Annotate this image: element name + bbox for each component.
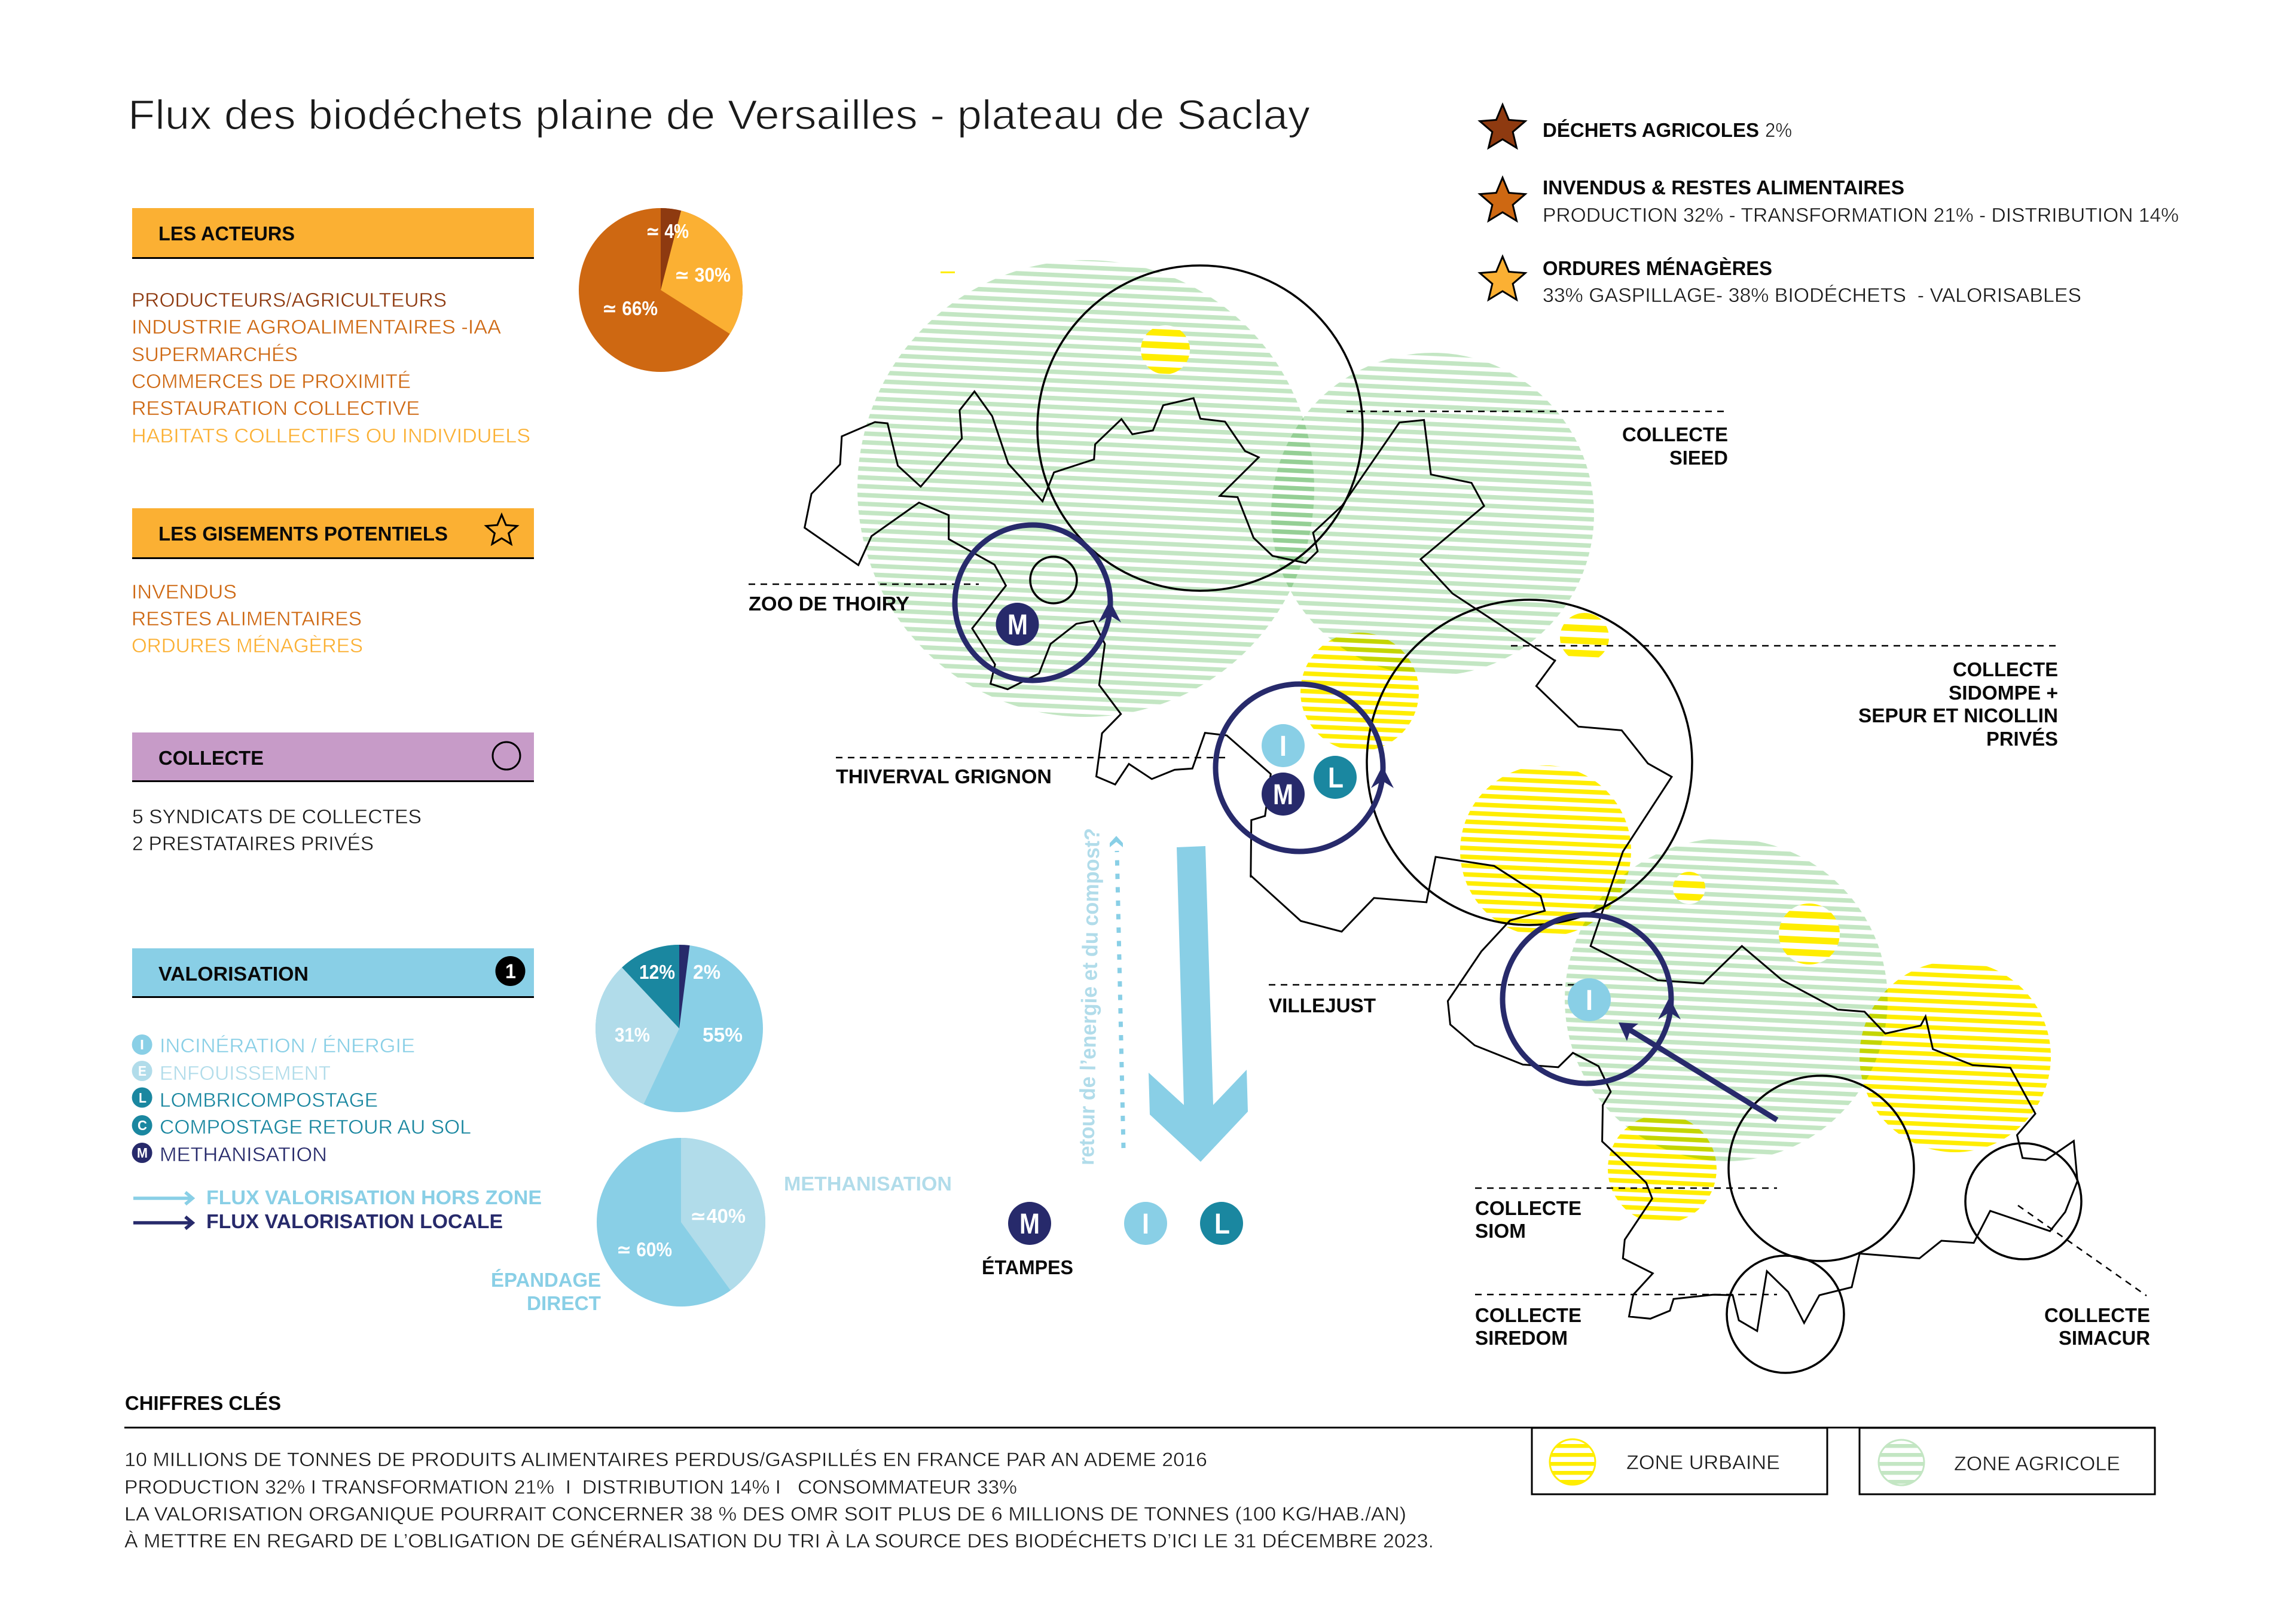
icon: star brown bbox=[1480, 105, 1525, 148]
legend: flux locale: FLUX VALORISATION LOCALE bbox=[206, 1210, 503, 1232]
pie chart: valorisation: 31% bbox=[615, 1024, 650, 1046]
site: zoo de thoiry bbox=[955, 525, 1121, 680]
legend: flux hors zone: FLUX VALORISATION HORS ZONE bbox=[206, 1186, 542, 1208]
text block: list of actors: SUPERMARCHÉS bbox=[132, 343, 298, 365]
legend: valorisation types: METHANISATION bbox=[160, 1143, 327, 1165]
badge: incineration etampes: I bbox=[1142, 1208, 1149, 1240]
label: collecte siom bbox=[1475, 1197, 1581, 1242]
heading: chiffres cles: CHIFFRES CLÉS bbox=[125, 1392, 281, 1414]
zones urbaines bbox=[941, 271, 2051, 1223]
text block: invendus: PRODUCTION 32% - TRANSFORMATION 21% - DISTRIBUTION 14% bbox=[1543, 204, 2179, 226]
panel: collecte bbox=[132, 732, 534, 854]
text block: invendus bbox=[1543, 176, 2179, 226]
zones agricoles bbox=[857, 260, 1888, 1161]
label: collecte siredom: SIREDOM bbox=[1475, 1327, 1568, 1349]
heading: les acteurs bbox=[132, 208, 534, 259]
site: villejust bbox=[1503, 915, 1681, 1083]
legend: valorisation types: LOMBRICOMPOSTAGE bbox=[160, 1089, 378, 1111]
pie chart: valorisation bbox=[596, 945, 763, 1112]
label: methanisation: METHANISATION bbox=[784, 1173, 952, 1195]
label: collecte siredom: COLLECTE bbox=[1475, 1304, 1581, 1326]
site: etampes: ÉTAMPES bbox=[982, 1256, 1073, 1278]
legend: valorisation types bbox=[132, 1034, 471, 1165]
legend: zone urbaine: ZONE URBAINE bbox=[1626, 1451, 1780, 1473]
pie chart: actors: ≃ 4% bbox=[646, 220, 689, 242]
panel: chiffres cles bbox=[124, 1392, 2155, 1552]
legend: zone agricole: ZONE AGRICOLE bbox=[1954, 1452, 2120, 1475]
text block: invendus: INVENDUS & RESTES ALIMENTAIRES bbox=[1543, 176, 1904, 199]
heading: collecte bbox=[132, 732, 534, 782]
panel: les acteurs bbox=[132, 208, 743, 447]
icon: star orange bbox=[1480, 178, 1525, 221]
text block: ordures: ORDURES MÉNAGÈRES bbox=[1543, 257, 1772, 279]
arrow: local flux to villejust bbox=[1619, 1022, 1777, 1120]
text block: collecte bbox=[132, 805, 422, 854]
icon: collecte circle bbox=[493, 742, 520, 770]
label: collecte siom: SIOM bbox=[1475, 1220, 1526, 1242]
pie chart: valorisation: 12% bbox=[639, 961, 675, 983]
heading: gisements bbox=[132, 508, 534, 559]
collecte circles bbox=[1030, 265, 2081, 1373]
text block: key figures bbox=[124, 1449, 1434, 1552]
text block: gisements list: ORDURES MÉNAGÈRES bbox=[132, 634, 363, 657]
legend: valorisation types: INCINÉRATION / ÉNERGIE bbox=[160, 1034, 415, 1057]
pie chart: actors: ≃ 66% bbox=[602, 297, 658, 319]
label: collecte sidompe: SIDOMPE + bbox=[1949, 682, 2058, 704]
legend: zone agricole bbox=[1860, 1428, 2155, 1494]
legend: valorisation types: ENFOUISSEMENT bbox=[160, 1062, 331, 1084]
site: etampes: M bbox=[1019, 1208, 1040, 1240]
text block: list of actors: COMMERCES DE PROXIMITÉ bbox=[132, 370, 411, 392]
panel: gisement legend top right bbox=[1480, 105, 2179, 306]
label: return flow: retour de l’energie et du compost? bbox=[1074, 828, 1104, 1165]
text block: collecte: 5 SYNDICATS DE COLLECTES bbox=[132, 805, 422, 828]
label: collecte siredom bbox=[1475, 1304, 1581, 1349]
panel: valorisation bbox=[132, 945, 952, 1314]
legend: valorisation types: E bbox=[138, 1063, 146, 1079]
pie chart: valorisation: 2% bbox=[693, 961, 720, 983]
site: thiverval grignon: L bbox=[1328, 762, 1344, 794]
text block: dechets agricoles: 2% bbox=[1765, 119, 1792, 141]
text block: ordures: 33% GASPILLAGE- 38% BIODÉCHETS - VALORISABLES bbox=[1543, 284, 2081, 306]
heading: valorisation bbox=[132, 948, 534, 998]
label: epandage direct bbox=[491, 1269, 601, 1314]
legend: valorisation types: I bbox=[140, 1037, 144, 1052]
arrow: flux hors zone bbox=[1149, 846, 1248, 1162]
text block: list of actors bbox=[132, 289, 530, 447]
label: collecte sieed: SIEED bbox=[1669, 447, 1728, 469]
text block: list of actors: RESTAURATION COLLECTIVE bbox=[132, 397, 420, 419]
text block: list of actors: INDUSTRIE AGROALIMENTAIRES -IAA bbox=[132, 316, 501, 338]
label: collecte sieed bbox=[1622, 423, 1728, 469]
label: thiverval grignon: THIVERVAL GRIGNON bbox=[836, 765, 1052, 787]
icon: star yellow bbox=[1480, 257, 1525, 300]
pie chart: valorisation: 55% bbox=[703, 1024, 743, 1046]
site: thiverval grignon: I bbox=[1280, 731, 1287, 762]
territory outline bbox=[805, 392, 2077, 1331]
label: collecte sidompe: SEPUR ET NICOLLIN bbox=[1858, 704, 2058, 726]
heading: collecte: COLLECTE bbox=[158, 747, 264, 769]
text block: gisements list: INVENDUS bbox=[132, 581, 237, 603]
text block: ordures bbox=[1543, 257, 2081, 306]
text block: list of actors: PRODUCTEURS/AGRICULTEURS bbox=[132, 289, 447, 311]
heading: valorisation: VALORISATION bbox=[158, 963, 309, 985]
site: etampes bbox=[982, 1202, 1073, 1278]
label: zoo de thoiry: ZOO DE THOIRY bbox=[749, 593, 909, 615]
pie chart: actors bbox=[579, 208, 743, 372]
badge: lombricompostage etampes bbox=[1200, 1202, 1243, 1245]
text block: key figures: PRODUCTION 32% I TRANSFORMATION 21% I DISTRIBUTION 14% I CONSOMMATEUR 33% bbox=[124, 1476, 1017, 1498]
label: collecte simacur: SIMACUR bbox=[2059, 1327, 2150, 1349]
legend: valorisation types: C bbox=[138, 1118, 147, 1133]
label: collecte sidompe bbox=[1858, 658, 2058, 750]
label: collecte sidompe: COLLECTE bbox=[1953, 658, 2058, 680]
arrow: return flow dotted bbox=[1110, 836, 1123, 1148]
text block: list of actors: HABITATS COLLECTIFS OU INDIVIDUELS bbox=[132, 425, 530, 447]
text block: gisements list bbox=[132, 581, 363, 657]
label: collecte simacur bbox=[2044, 1304, 2150, 1349]
text block: key figures: À METTRE EN REGARD DE L’OBLIGATION DE GÉNÉRALISATION DU TRI À LA SOURCE DES BIODÉCHETS D’ICI LE 31 DÉCEMBRE 2023. bbox=[124, 1530, 1434, 1552]
label: villejust: VILLEJUST bbox=[1269, 994, 1376, 1016]
badge: lombricompostage etampes: L bbox=[1214, 1208, 1230, 1240]
pie chart: methanisation / epandage: ≃ 60% bbox=[616, 1238, 672, 1260]
label: collecte sidompe: PRIVÉS bbox=[1986, 728, 2058, 750]
label: collecte sieed: COLLECTE bbox=[1622, 423, 1728, 445]
site: zoo de thoiry: M bbox=[1007, 609, 1028, 641]
badge: incineration etampes bbox=[1124, 1202, 1167, 1245]
site: villejust: I bbox=[1586, 985, 1593, 1016]
text block: collecte: 2 PRESTATAIRES PRIVÉS bbox=[132, 832, 374, 854]
text block: key figures: LA VALORISATION ORGANIQUE POURRAIT CONCERNER 38 % DES OMR SOIT PLUS DE 6 MILLIONS DE TONNES (100 KG/HAB./AN) bbox=[124, 1503, 1406, 1525]
panel: les gisements potentiels bbox=[132, 508, 534, 657]
label: collecte simacur: COLLECTE bbox=[2044, 1304, 2150, 1326]
heading: gisements: LES GISEMENTS POTENTIELS bbox=[158, 523, 448, 545]
pie chart: actors: ≃ 30% bbox=[674, 264, 731, 286]
label: collecte siom: COLLECTE bbox=[1475, 1197, 1581, 1219]
site: thiverval grignon bbox=[1216, 684, 1394, 851]
leader lines bbox=[749, 411, 2147, 1296]
text block: dechets agricoles: DÉCHETS AGRICOLES bbox=[1543, 119, 1759, 141]
label: epandage direct: DIRECT bbox=[527, 1292, 601, 1314]
legend: valorisation types: L bbox=[139, 1090, 146, 1106]
legend: valorisation types: M bbox=[137, 1145, 148, 1161]
heading: les acteurs: LES ACTEURS bbox=[158, 222, 295, 245]
legend: valorisation types: COMPOSTAGE RETOUR AU SOL bbox=[160, 1116, 471, 1138]
label: epandage direct: ÉPANDAGE bbox=[491, 1269, 601, 1291]
icon: number badge: 1 bbox=[505, 960, 516, 983]
legend: zone urbaine bbox=[1532, 1428, 1827, 1494]
text block: key figures: 10 MILLIONS DE TONNES DE PRODUITS ALIMENTAIRES PERDUS/GASPILLÉS EN FRANCE PAR AN ADEME 2016 bbox=[124, 1449, 1207, 1470]
icon: star outline bbox=[486, 515, 517, 544]
icon: number badge bbox=[495, 956, 525, 986]
title: Flux des biodéchets plaine de Versailles - plateau de Saclay bbox=[128, 91, 1310, 138]
site: thiverval grignon: M bbox=[1273, 779, 1293, 811]
text block: gisements list: RESTES ALIMENTAIRES bbox=[132, 608, 362, 630]
pie chart: methanisation / epandage: ≃40% bbox=[690, 1205, 746, 1227]
pie chart: methanisation / epandage bbox=[597, 1138, 765, 1306]
map bbox=[749, 260, 2150, 1373]
